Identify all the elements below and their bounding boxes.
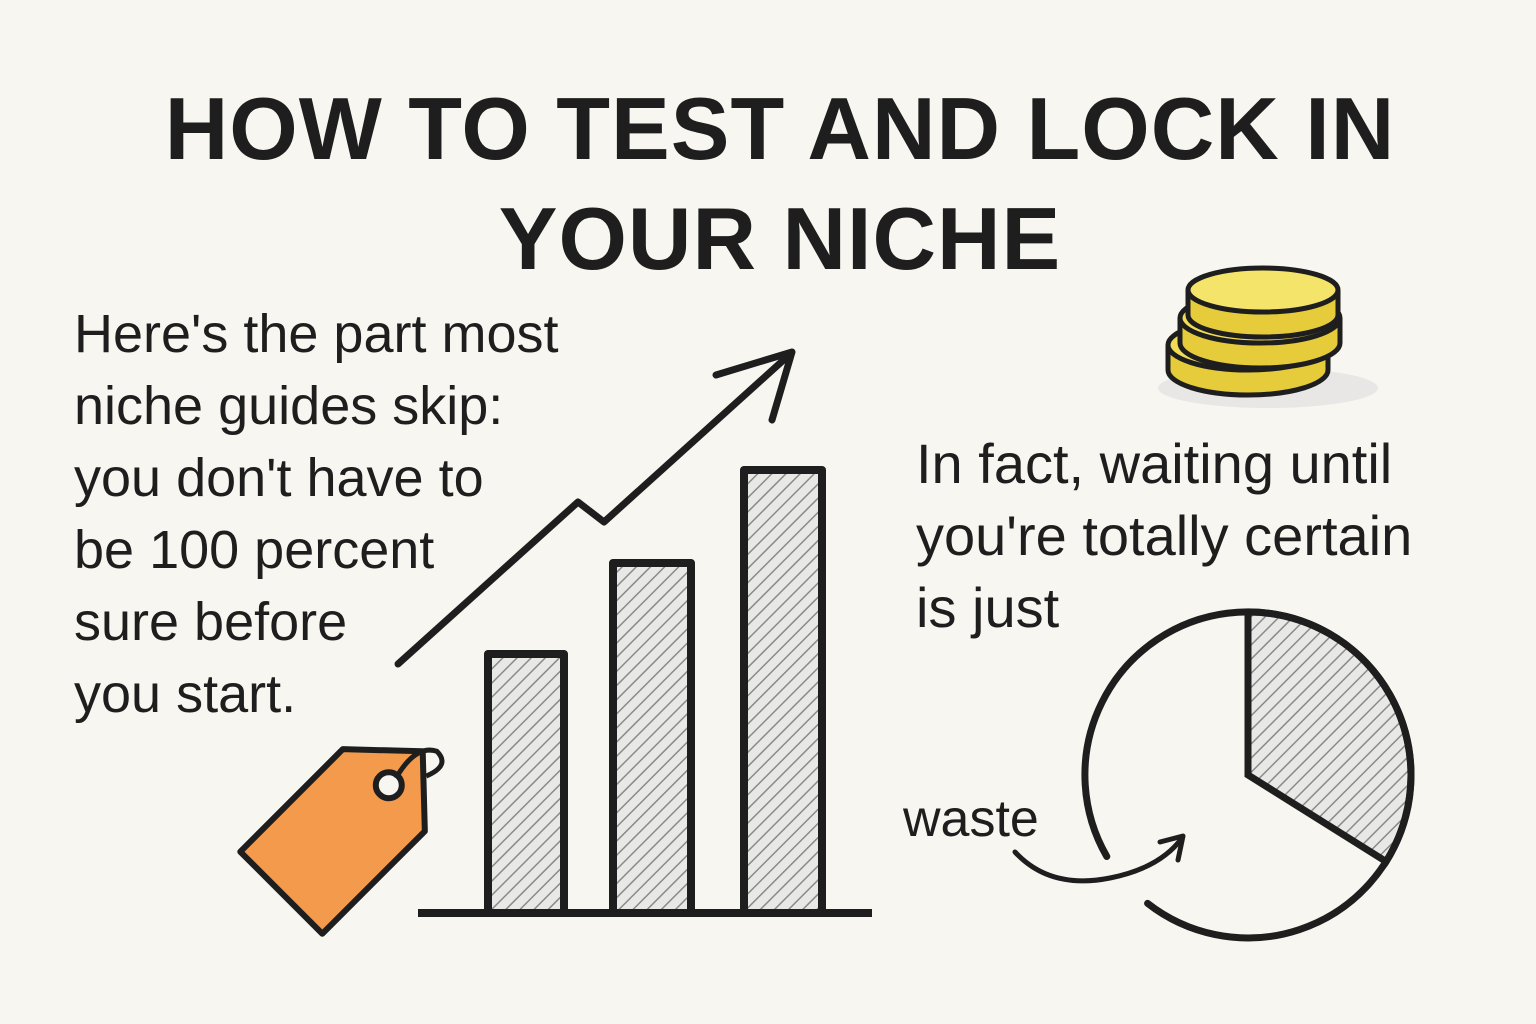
right text block <box>916 432 1412 639</box>
arrow: growth trend <box>398 352 792 664</box>
title: YOUR NICHE <box>499 189 1061 288</box>
left text block: Here's the part most <box>74 304 558 364</box>
label: waste: waste <box>902 790 1039 848</box>
left text block: you don't have to <box>74 448 484 508</box>
bar chart <box>418 470 872 913</box>
left text block <box>74 304 558 724</box>
left text block: be 100 percent <box>74 520 434 580</box>
arrow: waste pointer <box>1015 836 1183 881</box>
icon: coin stack <box>1158 268 1378 408</box>
right text block: is just <box>916 576 1059 639</box>
pie chart <box>1085 612 1411 938</box>
title <box>165 79 1395 288</box>
right text block: In fact, waiting until <box>916 432 1392 495</box>
left text block: sure before <box>74 592 347 652</box>
icon: price tag <box>240 703 471 934</box>
title: HOW TO TEST AND LOCK IN <box>165 79 1395 178</box>
left text block: you start. <box>74 664 296 724</box>
right text block: you're totally certain <box>916 504 1412 567</box>
left text block: niche guides skip: <box>74 376 503 436</box>
